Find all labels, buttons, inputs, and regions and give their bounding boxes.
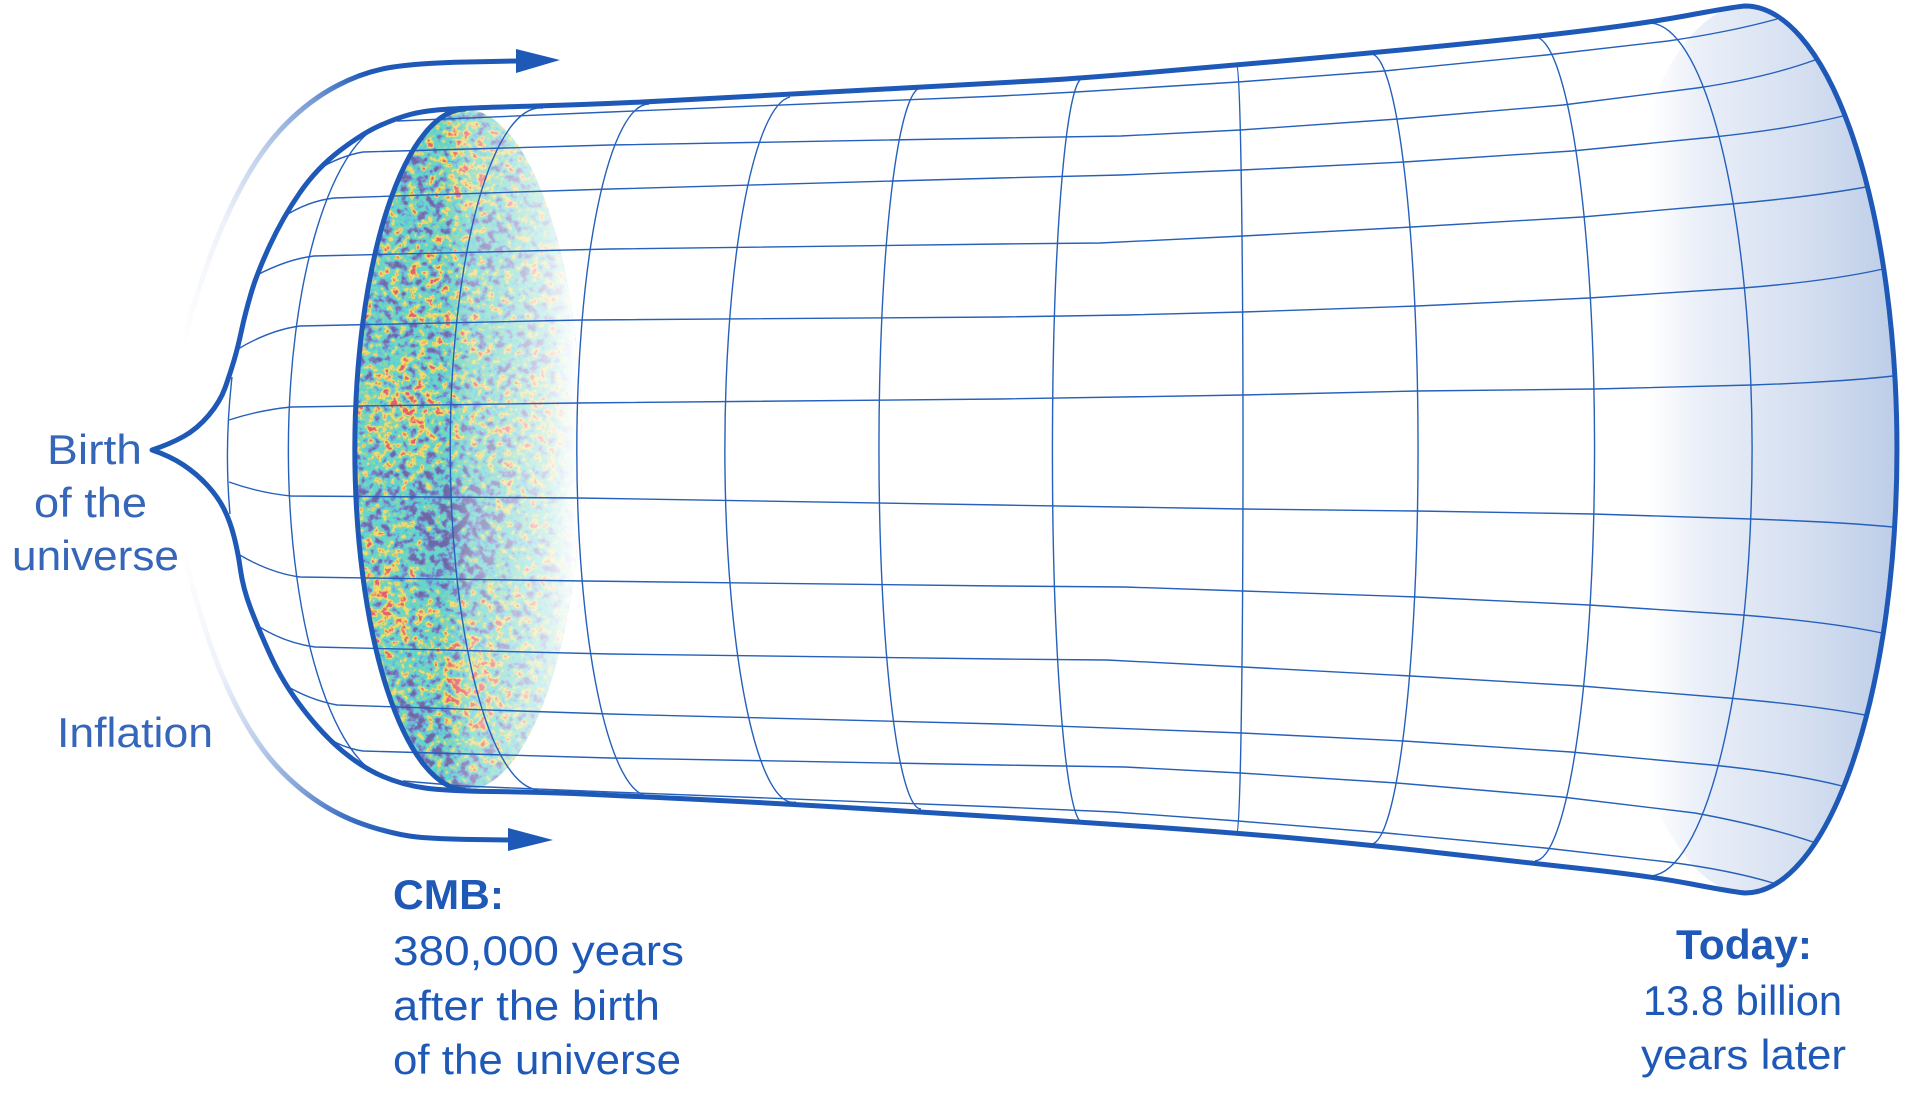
arrow: upper inflation arrow [183, 49, 560, 347]
label: birth of the universe: Birth [47, 426, 142, 473]
label: today [1641, 921, 1846, 1078]
label: birth of the universe [12, 426, 179, 579]
arrow: lower inflation arrow [183, 550, 553, 851]
label: CMB: of the universe [393, 1036, 681, 1083]
label: inflation: Inflation [57, 709, 213, 756]
end of the tube shading: today [1595, 6, 1897, 893]
CMB disc [357, 110, 582, 789]
CMB left edge [355, 109, 466, 790]
latitude lines [229, 19, 1893, 883]
label: today: 13.8 billion [1643, 977, 1842, 1024]
label: birth of the universe: of the [34, 479, 147, 526]
label: today: Today: [1676, 921, 1812, 968]
CMB noise map [357, 110, 582, 789]
CMB fade to white [450, 110, 582, 789]
label: CMB: after the birth [393, 982, 660, 1029]
label: CMB [393, 871, 684, 1083]
grid lines [227, 19, 1893, 883]
label: birth of the universe: universe [12, 532, 179, 579]
label: CMB: CMB: [393, 871, 504, 918]
label: CMB: 380,000 years [393, 927, 684, 974]
longitude lines [227, 23, 1752, 876]
tube outline [152, 6, 1897, 893]
label: today: years later [1641, 1031, 1846, 1078]
